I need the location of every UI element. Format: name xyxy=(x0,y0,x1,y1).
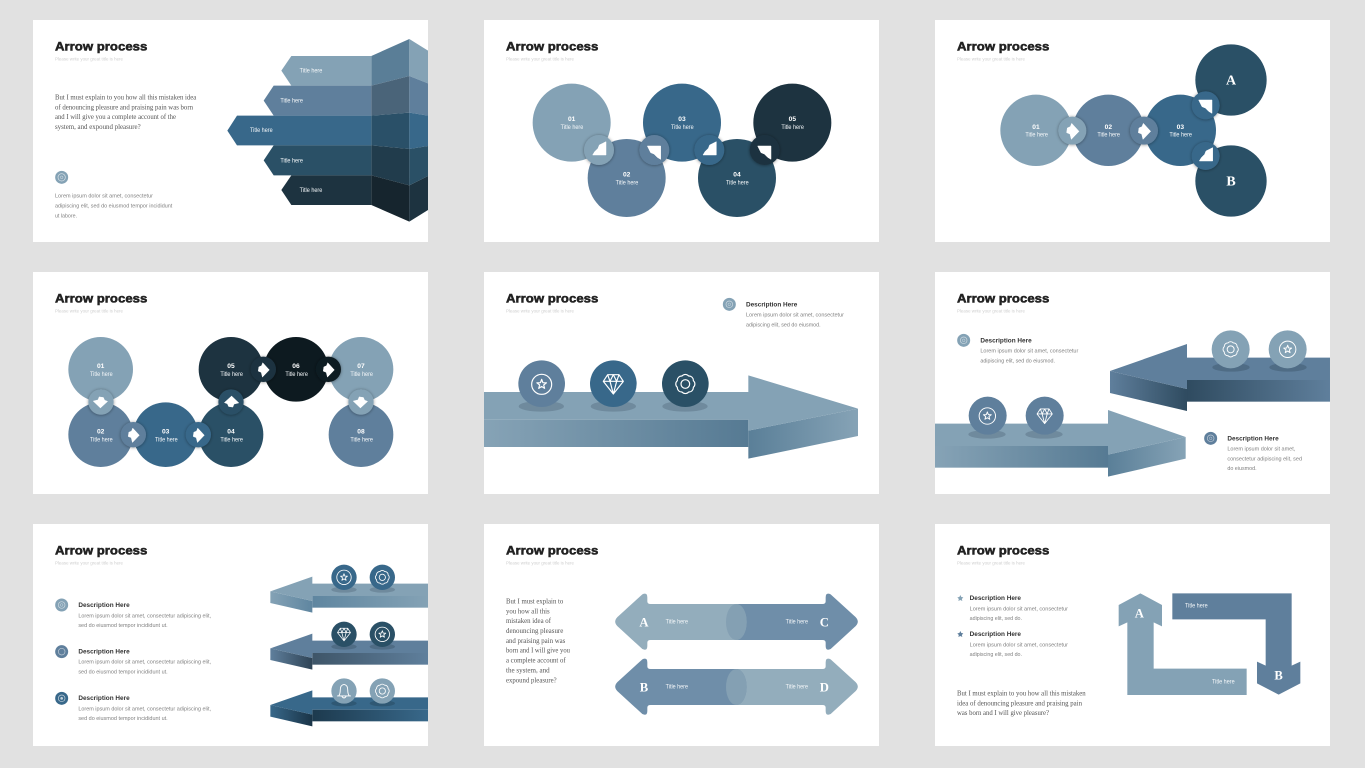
paragraph xyxy=(506,598,571,684)
marker: star xyxy=(370,622,395,650)
circle 04 xyxy=(199,402,263,467)
circle 05: 05 xyxy=(227,363,235,370)
description 2: Lorem ipsum dolor sit amet, consectetur xyxy=(970,642,1068,648)
title: Arrow process xyxy=(506,292,598,306)
description 1: adipiscing elit, sed do eiusmod. xyxy=(980,358,1055,364)
slide 3: branching circles xyxy=(935,20,1330,242)
circle 07: Title here xyxy=(350,372,374,378)
icon: small target xyxy=(55,692,68,705)
arrow B: Title here xyxy=(1185,604,1208,610)
circle 02 xyxy=(1073,95,1144,166)
paragraph: the system, and xyxy=(506,668,550,675)
description 1: Lorem ipsum dolor sit amet, consectetur adipiscing elit, xyxy=(78,613,211,619)
description 2: consectetur adipiscing elit, sed xyxy=(1227,456,1302,462)
icon: small gear xyxy=(957,334,970,347)
paragraph: you how all this xyxy=(506,608,550,615)
arrow 3: Title here xyxy=(250,128,273,134)
circle A: A xyxy=(1226,74,1236,89)
paragraph: mistaken idea of xyxy=(506,618,552,625)
circle 03: 03 xyxy=(1177,124,1184,131)
arrow pair B / D: Title here xyxy=(666,684,689,690)
circle 01: Title here xyxy=(561,125,584,131)
circle 03 xyxy=(1145,95,1216,166)
description 3: sed do eiusmod tempor incididunt ut. xyxy=(78,716,168,722)
paragraph: and praising pain was xyxy=(506,638,566,645)
description: adipiscing elit, sed do eiusmod. xyxy=(746,322,821,328)
arrow pair A / C: Title here xyxy=(666,619,689,625)
circle 05: 05 xyxy=(789,116,796,123)
arrow pair B / D: D xyxy=(820,680,829,694)
arrow 5: Title here xyxy=(300,188,323,194)
description 1: adipiscing elit, sed do. xyxy=(970,616,1022,622)
connector arrow A xyxy=(1192,91,1220,119)
title: Arrow process xyxy=(957,544,1049,558)
marker: star xyxy=(968,397,1007,439)
arrow B xyxy=(1172,593,1300,695)
circle 03 xyxy=(133,402,198,467)
circle 03: Title here xyxy=(671,125,694,131)
circle 02: 02 xyxy=(97,428,105,435)
arrow 2 xyxy=(264,86,371,116)
description: Description Here xyxy=(746,302,798,309)
title: Arrow process xyxy=(957,40,1049,54)
subtitle: Please write your great title is here xyxy=(957,56,1025,61)
slide 2: five linked circles xyxy=(484,20,879,242)
circle 01: 01 xyxy=(568,116,576,123)
arrow pair A / C xyxy=(615,594,858,650)
subtitle: Please write your great title is here xyxy=(55,560,123,565)
connector arrow 4-5 xyxy=(218,389,244,415)
paragraph xyxy=(957,690,1086,717)
circle 06: Title here xyxy=(285,372,309,378)
paragraph: denouncing pleasure xyxy=(506,628,563,635)
circle 02 xyxy=(588,139,666,217)
connector arrow 2 xyxy=(639,135,669,165)
description 1 xyxy=(980,337,1078,364)
connector arrow 4 xyxy=(750,135,780,165)
circle 05 xyxy=(753,84,831,162)
circle 05 xyxy=(199,337,263,402)
description 1: sed do eiusmod tempor incididunt ut. xyxy=(78,623,168,629)
title: Arrow process xyxy=(506,544,598,558)
arrow A xyxy=(1119,593,1247,695)
circle 08: 08 xyxy=(357,428,365,435)
title: Arrow process xyxy=(957,292,1049,306)
circle 01: 01 xyxy=(97,363,105,370)
connector arrow 6-7 xyxy=(316,357,341,382)
slide 9: bent arrows cycle xyxy=(935,524,1330,746)
description 1 xyxy=(78,602,211,629)
connector arrow B xyxy=(1192,142,1220,170)
slide 7: three left arrows xyxy=(33,524,428,746)
lorem text xyxy=(55,194,173,219)
subtitle: Please write your great title is here xyxy=(957,308,1025,313)
arrow pair A / C: Title here xyxy=(786,619,809,625)
circle 08: Title here xyxy=(350,437,374,443)
paragraph: idea of denouncing pleasure and praising pain xyxy=(957,700,1083,707)
icon: small gear xyxy=(55,598,68,611)
icon: star xyxy=(957,631,963,637)
circle 01: 01 xyxy=(1032,124,1040,131)
lorem text: Lorem ipsum dolor sit amet, consectetur xyxy=(55,194,153,200)
circle 01: Title here xyxy=(1025,133,1049,139)
arrow 4: Title here xyxy=(280,158,304,164)
subtitle: Please write your great title is here xyxy=(957,560,1025,565)
circle 07 xyxy=(329,337,393,402)
marker: gear xyxy=(370,565,395,593)
description: Lorem ipsum dolor sit amet, consectetur xyxy=(746,313,844,319)
arrow 2 xyxy=(270,634,428,670)
circle 03: 03 xyxy=(162,428,170,435)
intro paragraph xyxy=(55,94,196,131)
marker: gear xyxy=(370,678,395,706)
connector arrow 7-8 xyxy=(348,389,374,415)
circle 04: Title here xyxy=(726,180,749,186)
paragraph: But I must explain to you how all this mistaken xyxy=(957,690,1086,697)
marker: diamond xyxy=(1025,397,1064,439)
circle B xyxy=(1195,145,1267,217)
circle 06 xyxy=(264,337,328,402)
description 3: Description Here xyxy=(78,695,130,702)
circle 03: Title here xyxy=(1169,133,1193,139)
description 2: adipiscing elit, sed do. xyxy=(970,652,1022,658)
circle 02: 02 xyxy=(623,171,631,178)
description 1: Lorem ipsum dolor sit amet, consectetur xyxy=(980,348,1078,354)
title: Arrow process xyxy=(55,40,147,54)
3D fold of arrows xyxy=(371,39,428,222)
subtitle: Please write your great title is here xyxy=(55,308,123,313)
arrow 4 xyxy=(264,145,371,175)
slide 1: layered arrows xyxy=(33,20,428,242)
description 2: Lorem ipsum dolor sit amet, consectetur adipiscing elit, xyxy=(78,660,211,666)
connector arrow 3 xyxy=(694,135,724,165)
connector arrow 1-2 xyxy=(88,389,114,415)
arrow A: Title here xyxy=(1212,680,1235,686)
description 2: Lorem ipsum dolor sit amet, xyxy=(1227,446,1296,452)
circle 02: Title here xyxy=(616,180,639,186)
icon: small gear xyxy=(723,298,736,311)
circle 02: Title here xyxy=(90,437,113,443)
description 2 xyxy=(78,648,211,676)
description 1 xyxy=(970,595,1068,622)
arrow 3 xyxy=(227,116,371,145)
slide 8: double arrows xyxy=(484,524,879,746)
circle 02: 02 xyxy=(1105,124,1112,131)
slide 5: single 3D arrow xyxy=(484,272,879,494)
arrow pair A / C: A xyxy=(639,615,649,629)
circle 04: Title here xyxy=(220,437,244,443)
subtitle: Please write your great title is here xyxy=(506,560,574,565)
description 2: Description Here xyxy=(78,648,130,655)
arrow pair B / D: B xyxy=(640,680,649,694)
marker: star xyxy=(331,565,357,593)
subtitle: Please write your great title is here xyxy=(506,56,574,61)
description 3: Lorem ipsum dolor sit amet, consectetur adipiscing elit, xyxy=(78,706,211,712)
arrow 1 xyxy=(270,577,428,613)
circle 01: Title here xyxy=(90,372,113,378)
paragraph: But I must explain to xyxy=(506,598,564,605)
circle B: B xyxy=(1226,175,1236,190)
slide 6: opposing 3D arrows xyxy=(935,272,1330,494)
icon: small diamond xyxy=(55,645,68,658)
connector arrow 1 xyxy=(1058,117,1086,145)
marker: star xyxy=(1269,330,1307,372)
circle 02: Title here xyxy=(1097,133,1121,139)
circle A xyxy=(1195,44,1267,116)
circle 02 xyxy=(68,402,133,467)
connector arrow 5-6 xyxy=(251,357,276,382)
3D arrow xyxy=(484,375,858,459)
intro paragraph: of denouncing pleasure and praising pain was born xyxy=(55,104,194,111)
arrow pair A / C: C xyxy=(820,615,829,629)
intro paragraph: and I will give you a complete account of the xyxy=(55,114,176,121)
title: Arrow process xyxy=(506,40,598,54)
subtitle: Please write your great title is here xyxy=(55,56,123,61)
circle 04 xyxy=(698,139,776,217)
icon: target xyxy=(55,171,68,184)
circle 01 xyxy=(1000,95,1072,166)
circle 07: 07 xyxy=(357,363,365,370)
left-pointing 3D arrow xyxy=(1110,344,1330,411)
circle 08 xyxy=(329,402,393,467)
description 2: Description Here xyxy=(970,631,1021,638)
arrow pair B / D xyxy=(615,659,858,715)
description 2: Description Here xyxy=(1227,435,1279,442)
paragraph: expound pleasure? xyxy=(506,677,557,684)
connector arrow 2-3 xyxy=(121,422,146,447)
connector arrow 1 xyxy=(584,135,614,165)
intro paragraph: But I must explain to you how all this mistaken idea xyxy=(55,94,196,101)
circle 01 xyxy=(68,337,133,402)
marker: diamond xyxy=(331,622,357,650)
description 2 xyxy=(970,631,1068,658)
marker: gear xyxy=(662,360,709,412)
description 1: Description Here xyxy=(970,595,1021,602)
circle 06: 06 xyxy=(292,363,300,370)
lorem text: ut labore. xyxy=(55,213,77,219)
arrow 1 xyxy=(281,56,371,86)
paragraph: born and I will give you xyxy=(506,648,571,655)
marker: star xyxy=(518,360,565,412)
description 1: Lorem ipsum dolor sit amet, consectetur xyxy=(970,606,1068,612)
circle 04: 04 xyxy=(227,428,235,435)
arrow 5 xyxy=(281,175,371,205)
circle 01 xyxy=(533,84,611,162)
circle 05: Title here xyxy=(781,125,805,131)
description 1: Description Here xyxy=(78,602,130,609)
arrow 1: Title here xyxy=(300,69,323,75)
marker: diamond xyxy=(590,360,637,412)
circle 03: Title here xyxy=(155,437,178,443)
right-pointing 3D arrow xyxy=(935,410,1186,477)
description 3 xyxy=(78,695,211,722)
arrow 3 xyxy=(270,690,428,726)
intro paragraph: system, and expound pleasure? xyxy=(55,124,141,131)
circle 05: Title here xyxy=(220,372,244,378)
description 2 xyxy=(1227,435,1302,472)
lorem text: adipiscing elit, sed do eiusmod tempor incididunt xyxy=(55,203,173,209)
circle 04: 04 xyxy=(733,171,741,178)
arrow pair B / D: Title here xyxy=(786,684,809,690)
paragraph: a complete account of xyxy=(506,658,566,665)
subtitle: Please write your great title is here xyxy=(506,308,574,313)
title: Arrow process xyxy=(55,544,147,558)
description 2: do eiusmod. xyxy=(1227,466,1257,472)
circle 03: 03 xyxy=(678,116,686,123)
connector arrow 3-4 xyxy=(186,422,211,447)
marker: bell xyxy=(331,678,357,706)
paragraph: was born and I will give pleasure? xyxy=(957,710,1049,717)
icon: small gear xyxy=(1204,432,1217,445)
description xyxy=(746,302,844,328)
description 2: sed do eiusmod tempor incididunt ut. xyxy=(78,670,168,676)
description 1: Description Here xyxy=(980,337,1032,344)
circle 03 xyxy=(643,84,721,162)
connector arrow 2 xyxy=(1130,117,1158,145)
title: Arrow process xyxy=(55,292,147,306)
icon: star xyxy=(957,595,963,601)
arrow 2: Title here xyxy=(280,98,304,104)
marker: gear xyxy=(1212,330,1250,372)
arrow A: A xyxy=(1135,606,1145,620)
slide 4: eight linked circles xyxy=(33,272,428,494)
arrow B: B xyxy=(1274,668,1283,682)
